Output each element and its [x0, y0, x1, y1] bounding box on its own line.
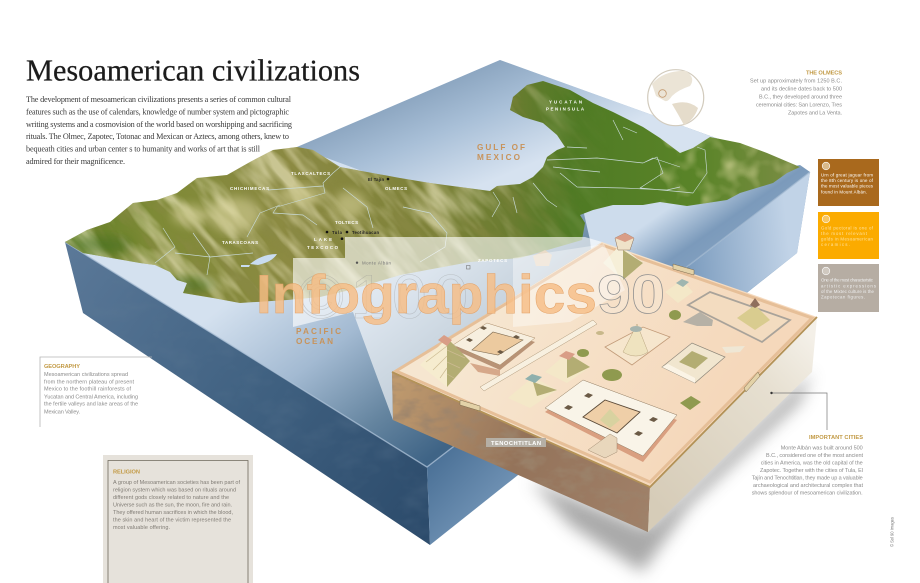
text block: the Olmecs: and its decline dates back to 500	[761, 86, 842, 92]
panel: figures	[818, 264, 879, 312]
callout arrow: important cities	[770, 392, 827, 430]
panel: religion: They offered human sacrifices in which the blood,	[113, 510, 233, 516]
map labels: regions: TEXCOCO	[307, 245, 339, 250]
intro paragraph: admired for their magnificence.	[26, 157, 125, 166]
text block: geography: Mexico to the foothill rainforests of	[44, 386, 131, 392]
map labels: cities: El Tajín	[368, 177, 384, 182]
shadow under city block	[530, 372, 812, 572]
text block: the Olmecs: Zapotes and La Venta.	[788, 110, 842, 116]
text block: geography: the fertile valleys and lake areas of the	[44, 402, 138, 408]
text block: the Olmecs	[750, 70, 842, 116]
wall strip	[480, 320, 597, 391]
block edge highlight	[65, 172, 810, 467]
map labels: regions: OLMECS	[385, 186, 407, 191]
label: Tenochtitlan: TENOCHTITLAN	[491, 441, 541, 447]
map labels: regions	[222, 100, 585, 250]
text block: geography: GEOGRAPHY	[44, 364, 80, 370]
panel: jaguar urn: the most valuable pieces	[821, 184, 874, 188]
intro paragraph: features such as the use of calendars, knowledge of number system and pictographic	[26, 108, 289, 116]
right upper compound	[683, 292, 790, 353]
city block	[392, 233, 817, 532]
text block: the Olmecs: ceremonial cities: San Lorenzo, Tres	[756, 102, 842, 108]
watermark: Infographics	[256, 263, 597, 325]
city top	[392, 242, 817, 487]
intro paragraph: The development of mesoamerican civilizations presents a series of common cultural	[26, 95, 292, 104]
rivers	[155, 120, 707, 275]
panel: gold pectoral: Gold pectoral is one of	[821, 226, 874, 230]
label: Monte Alban: ZAPOTECS	[478, 258, 507, 263]
map labels: oceans: GULF OF	[477, 143, 525, 152]
bottom compound	[545, 380, 677, 462]
text block: the Olmecs: THE OLMECS	[806, 70, 842, 76]
panel: figures: Zapotecan figures.	[821, 294, 865, 300]
map labels: oceans: OCEAN	[296, 337, 333, 346]
label: Monte Alban	[356, 258, 507, 269]
beam veil over city	[513, 244, 625, 327]
text block: important cities: IMPORTANT CITIES	[809, 435, 863, 441]
left side face	[65, 242, 430, 545]
map labels: cities	[326, 177, 389, 240]
map labels: regions: TARASCOANS	[222, 240, 258, 245]
panel: jaguar urn: found in Mount Albán.	[821, 190, 867, 194]
panel: gold pectoral: ceramics.	[821, 242, 850, 247]
front side face	[427, 172, 810, 545]
text block: important cities: Zapotec. Together with the cities of Tula, El	[760, 468, 863, 474]
panel: religion: RELIGION	[113, 470, 140, 476]
map labels: regions: PENINSULA	[546, 106, 585, 112]
lake	[241, 254, 277, 267]
city right face	[648, 317, 817, 532]
map labels: regions: TOLTECS	[335, 220, 358, 225]
text block: important cities: cities in America, was the old capital of the	[761, 460, 863, 466]
map block	[64, 60, 810, 545]
text block: important cities: shows splendour of mesoamerican civilization.	[752, 490, 863, 496]
round central pyramid	[605, 324, 670, 365]
map labels: cities: Tula	[332, 230, 343, 235]
panel: jaguar urn	[818, 159, 879, 206]
map labels: regions: CHICHIMECAS	[230, 186, 269, 191]
panel: figures: of the Mixtec culture is the	[821, 289, 875, 294]
intro paragraph	[26, 95, 292, 166]
icon: pectoral	[822, 215, 830, 223]
map labels: regions: LAKE	[314, 237, 332, 242]
text block: the Olmecs: B.C., they developed around three	[759, 94, 842, 100]
panel: jaguar urn: Urn of great jaguar from	[821, 172, 873, 178]
map labels: cities: Teotihuacan	[352, 230, 379, 235]
panel: religion: different gods closely related to nature and the	[113, 495, 229, 501]
panel: religion	[103, 455, 253, 583]
panel: religion: Universe such as the sun, the moon, fire and rain.	[113, 502, 232, 508]
left pyramid	[420, 335, 470, 387]
text block: important cities: Tajín and Tenochtitlan, they made up a valuable	[752, 476, 863, 482]
intro paragraph: writing systems and a cosmovision of the world based on worshipping and sacrificing	[26, 120, 292, 129]
city left face	[392, 372, 650, 532]
text block: the Olmecs: Set up approximately from 1250 B.C.	[750, 78, 842, 84]
text block: geography: Mesoamerican civilizations spread	[44, 372, 128, 378]
map labels: oceans: MEXICO	[477, 153, 521, 162]
gates	[460, 264, 760, 411]
caribbean water	[582, 165, 810, 332]
panel: jaguar urn: the 8th century is one of	[821, 178, 874, 183]
land	[65, 81, 800, 303]
panel: gold pectoral: the most relevant	[821, 231, 868, 236]
panel: figures: artistic expressions	[821, 284, 877, 288]
label: Monte Alban: Monte Albán	[362, 260, 392, 266]
small pyramids	[508, 279, 693, 408]
right side face	[640, 172, 810, 370]
panel: religion: most valuable offering.	[113, 525, 170, 531]
text block: important cities: Monte Albán was built around 500	[781, 446, 863, 452]
map labels: oceans: PACIFIC	[296, 327, 341, 336]
text block: geography: Mexican Valley.	[44, 410, 80, 416]
upper left compound	[453, 323, 535, 376]
back temple with tower	[533, 233, 643, 280]
map labels: oceans	[296, 143, 525, 346]
gardens	[577, 310, 701, 410]
panel: figures: One of the most characteristic	[821, 278, 874, 282]
gulf water	[297, 60, 810, 200]
panel: religion: A group of Mesoamerican societies has been part of	[113, 480, 240, 486]
map labels: regions: YUCATAN	[549, 100, 582, 104]
text block: geography: from the northern plateau of present	[44, 380, 134, 386]
map labels: regions: TLAXCALTECS	[291, 171, 330, 176]
pacific water	[65, 60, 810, 467]
watermark: ©100	[298, 263, 468, 332]
highlight beam from map to city	[293, 237, 602, 420]
locator globe	[648, 70, 704, 126]
text block: important cities: archaeological and architectural complex that	[753, 483, 863, 489]
panel: religion: the skin and heart of the victim represented the	[113, 518, 231, 524]
text block: important cities: B.C., considered one of the most ancient	[766, 453, 863, 459]
watermark: 90	[597, 263, 665, 325]
intro paragraph: rituals. The Olmec, Zapotec, Totonac and Mexican or Aztecs, among others, knew to	[26, 132, 289, 141]
icon: figure	[822, 267, 830, 275]
right middle compound	[662, 343, 725, 383]
icon: urn	[822, 162, 830, 170]
city rim	[392, 317, 817, 487]
text block: geography: Yucatan and Central America, including	[44, 394, 138, 400]
label: Tenochtitlan	[486, 438, 546, 447]
panel: gold pectoral: golds in Mesoamerican	[821, 236, 874, 242]
panel: religion: religion system which was based on rituals around	[113, 488, 236, 494]
intro paragraph: bequeath cities and urban center s to humanity and works of art that is still	[26, 144, 261, 154]
copyright: © Sol 90 Images	[890, 517, 894, 547]
title: Mesoamerican civilizations	[26, 52, 360, 88]
panel: gold pectoral	[818, 212, 879, 259]
text block: geography	[40, 357, 152, 427]
text block: important cities	[752, 435, 863, 496]
